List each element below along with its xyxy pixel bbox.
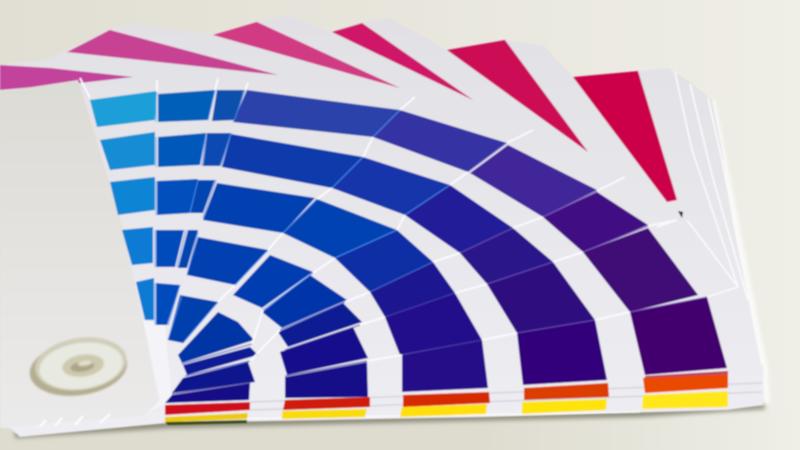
seams on coloured swatches <box>155 90 707 394</box>
magenta back swatches <box>0 22 677 202</box>
shadow under the fan <box>15 404 765 438</box>
leaf B: blue swatches <box>156 90 215 325</box>
white seam ticks across bands <box>80 78 677 361</box>
stacked page edges <box>165 72 762 420</box>
ring 1 swatches <box>165 295 258 403</box>
ring 2 swatches <box>187 237 368 398</box>
red and yellow base swatches <box>165 371 728 425</box>
leaf C: deep blue swatches <box>178 90 244 268</box>
ring 4 swatches <box>222 134 607 385</box>
small dark mark <box>678 211 683 218</box>
leaf A: light blue swatches <box>90 91 157 320</box>
ring 5: outermost swatches <box>233 90 727 375</box>
white wedge at hub <box>143 320 172 415</box>
lower page fan tips <box>40 414 110 427</box>
grommet <box>26 332 131 402</box>
white glow along right edge <box>712 100 767 404</box>
cover card <box>0 80 160 428</box>
ring 3 swatches <box>203 183 488 392</box>
